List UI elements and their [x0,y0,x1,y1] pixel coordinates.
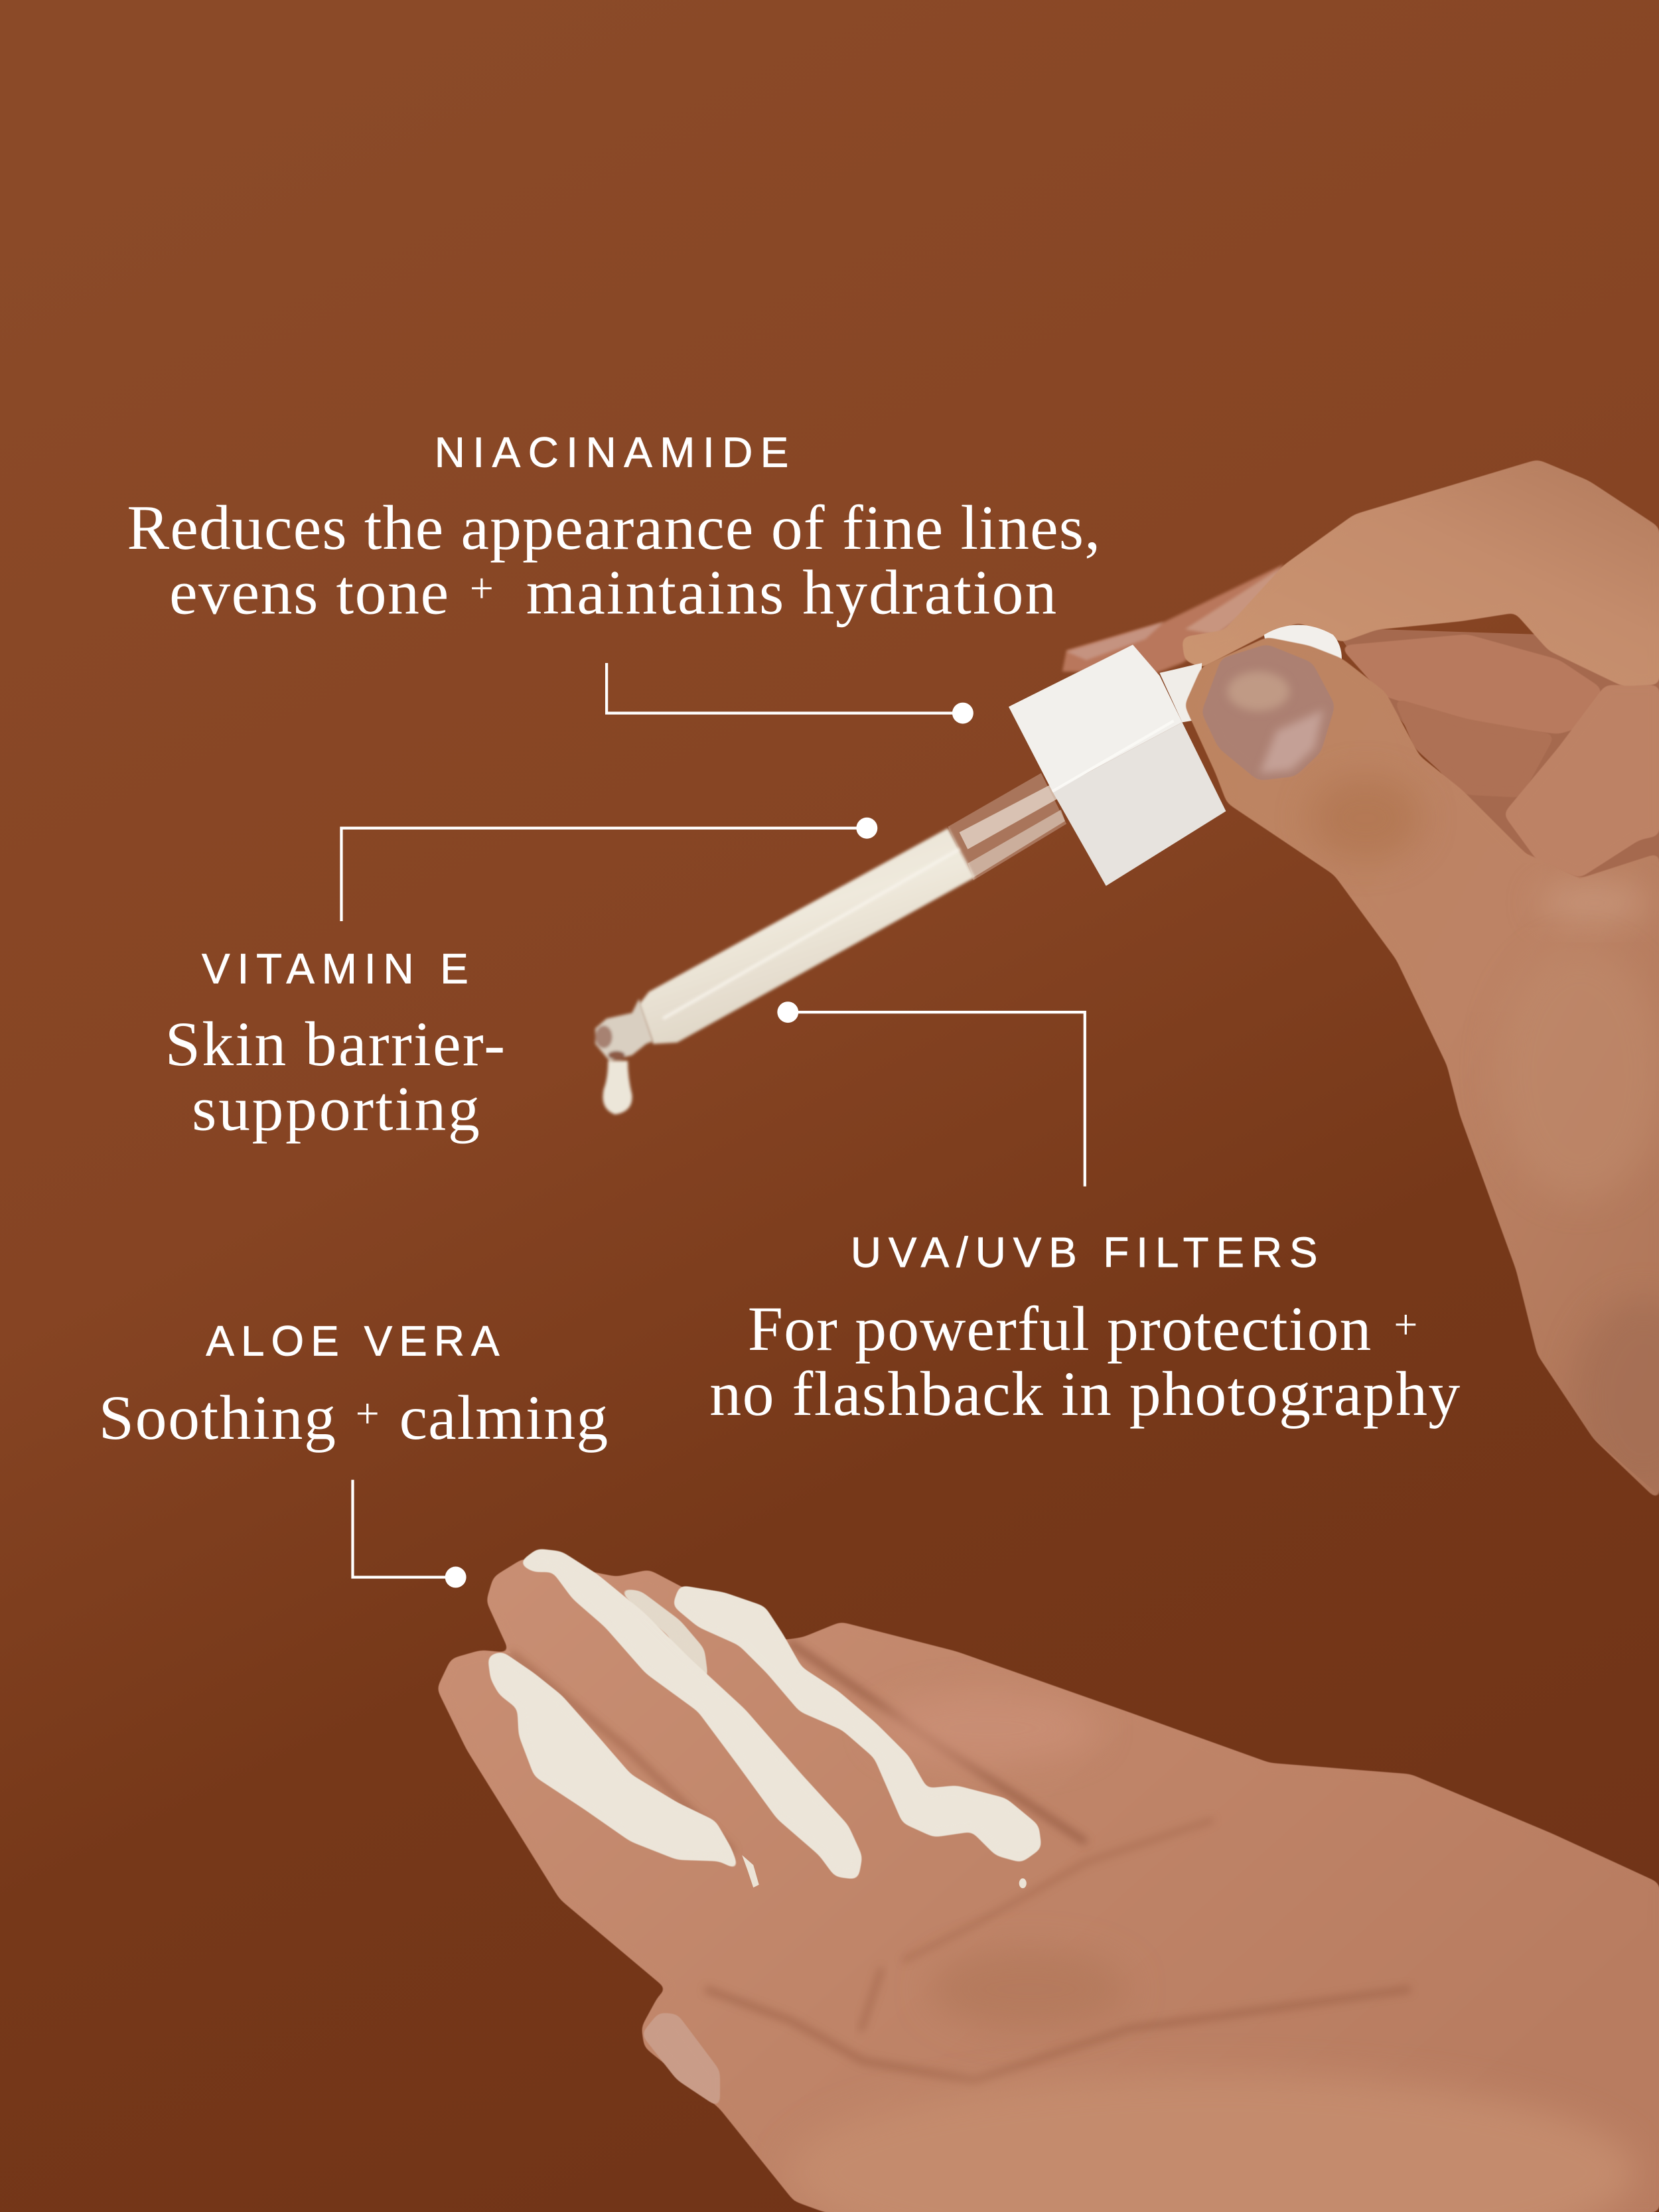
body: UVA/UVB line 1: + [1394,1301,1417,1348]
text block: aloe vera [99,1317,608,1453]
body: aloe vera line: Soothing [99,1382,336,1453]
body: vitamin E line 2: supporting [192,1074,480,1144]
cream: long centre stroke [519,1549,862,1879]
body: aloe vera line: calming [399,1382,608,1453]
text block: niacinamide [127,429,1100,628]
heading: niacinamide: NIACINAMIDE [435,429,788,477]
body: aloe vera line [99,1382,608,1453]
heading: aloe vera: ALOE VERA [206,1317,500,1365]
hand: nail highlights [1227,672,1323,773]
text block: vitamin E [165,945,505,1144]
hand: creases and shading [511,1642,1636,2212]
heading: vitamin E: VITAMIN E [202,945,469,993]
hand: palm and fingers [437,1559,1659,2212]
cream: left stroke [488,1652,739,1871]
body: niacinamide line 1: Reduces the appearance of fine lines, [127,492,1100,563]
hand: thumb nail [1202,644,1334,780]
hand: thumb and wrist [1185,638,1659,1501]
hand: back fingers [1062,564,1659,886]
callout: niacinamide leader line [607,663,974,723]
body: aloe vera line: + [356,1390,380,1437]
dropper [595,625,1342,1114]
heading: UVA/UVB filters: UVA/UVB FILTERS [851,1228,1318,1276]
hand: thumb nail [642,2013,719,2108]
body: niacinamide line 2 [169,557,1056,628]
body: niacinamide line 2: + [470,565,494,612]
text block: UVA/UVB filters [709,1228,1460,1429]
hand: index finger [1182,460,1659,686]
photo: lower open hand with cream [437,1549,1659,2212]
glass tube [948,773,1066,880]
dropper knob [1159,625,1342,722]
photo: upper hand holding dropper [595,460,1659,1501]
body: niacinamide line 2: maintains hydration [526,557,1056,628]
body: niacinamide line 2: evens tone [169,557,449,628]
cap [1009,644,1226,886]
body: vitamin E line 1: Skin barrier- [165,1009,505,1079]
cream: small curl [618,1588,708,1682]
cream: wavy right stroke [673,1585,1041,1862]
body: UVA/UVB line 2: no flashback in photography [709,1359,1460,1429]
cream: drips [742,1855,1027,1888]
tip and drop [595,999,653,1114]
callout: vitamin E leader line [341,818,877,921]
callout: aloe vera leader line [352,1480,467,1587]
hand: thumb shading [1309,776,1659,1495]
callout: UVA/UVB leader line [777,1001,1085,1187]
milk-filled tube [639,828,975,1044]
body: UVA/UVB line 1: For powerful protection [748,1293,1371,1364]
